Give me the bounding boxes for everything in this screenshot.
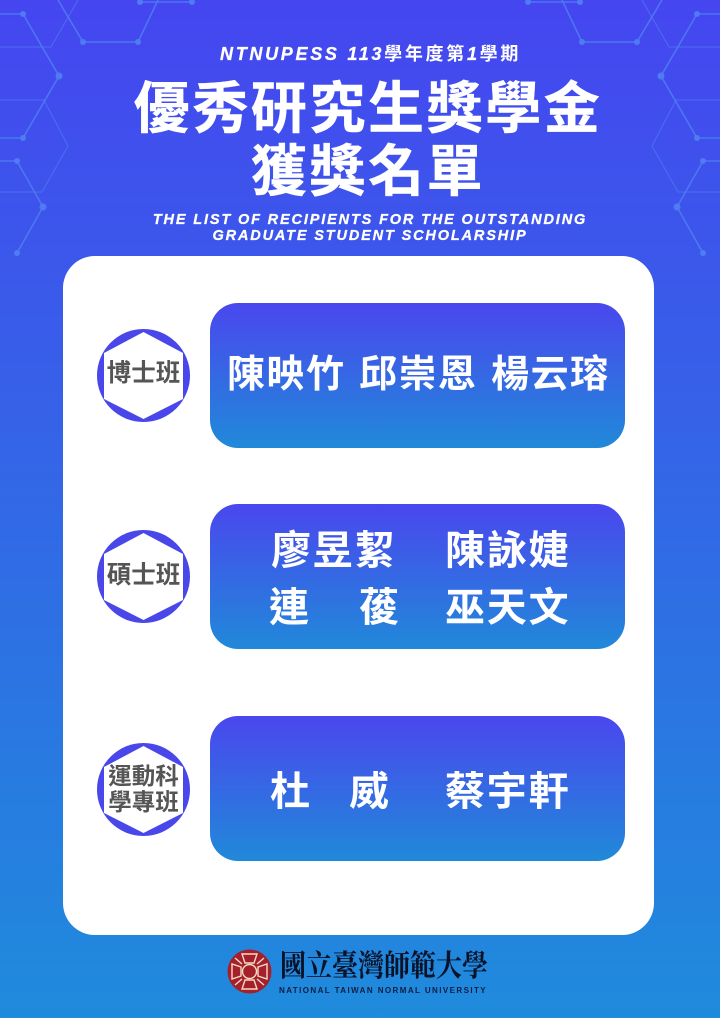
names: master row 2 right: 巫天文 [445, 586, 570, 630]
badge: sports science [97, 743, 190, 836]
label: sports science [108, 763, 179, 815]
pill: sports science names [210, 716, 625, 861]
names: doctoral: 陳映竹 邱崇恩 楊云瑢 [227, 354, 610, 396]
panel: recipients card [63, 256, 654, 935]
names: sports right: 蔡宇軒 [445, 770, 570, 814]
background hexagon pattern [0, 0, 720, 256]
university English name: NATIONAL TAIWAN NORMAL UNIVERSITY [279, 986, 487, 995]
names: master row 1 left: 廖昱絜 [271, 529, 396, 573]
names: master row 1 right: 陳詠婕 [445, 529, 570, 573]
label: sports science: 運動科 [108, 763, 179, 789]
main title [134, 77, 602, 203]
English subtitle: GRADUATE STUDENT SCHOLARSHIP [213, 228, 527, 244]
English subtitle: THE LIST OF RECIPIENTS FOR THE OUTSTANDING [153, 212, 587, 228]
main title: 優秀研究生獎學金 [134, 77, 602, 140]
names: sports middle: 威 [349, 770, 391, 814]
names: master row 2 left: 連 [269, 586, 311, 630]
label: sports science: 學專班 [108, 789, 179, 815]
pill: doctoral names [210, 303, 625, 448]
English subtitle [153, 212, 587, 244]
term heading: NTNUPESS 113學年度第1學期 [220, 44, 521, 64]
main title: 獲獎名單 [251, 140, 485, 203]
university name: 國立臺灣師範大學 [280, 950, 488, 983]
pill: master names [210, 504, 625, 649]
badge: doctoral [97, 329, 190, 422]
names: master row 2 middle: 葰 [359, 586, 401, 630]
badge: master [97, 530, 190, 623]
names: sports left: 杜 [270, 770, 312, 814]
label: doctoral: 博士班 [107, 360, 180, 387]
label: master: 碩士班 [107, 562, 180, 589]
icon: university seal [228, 950, 272, 994]
